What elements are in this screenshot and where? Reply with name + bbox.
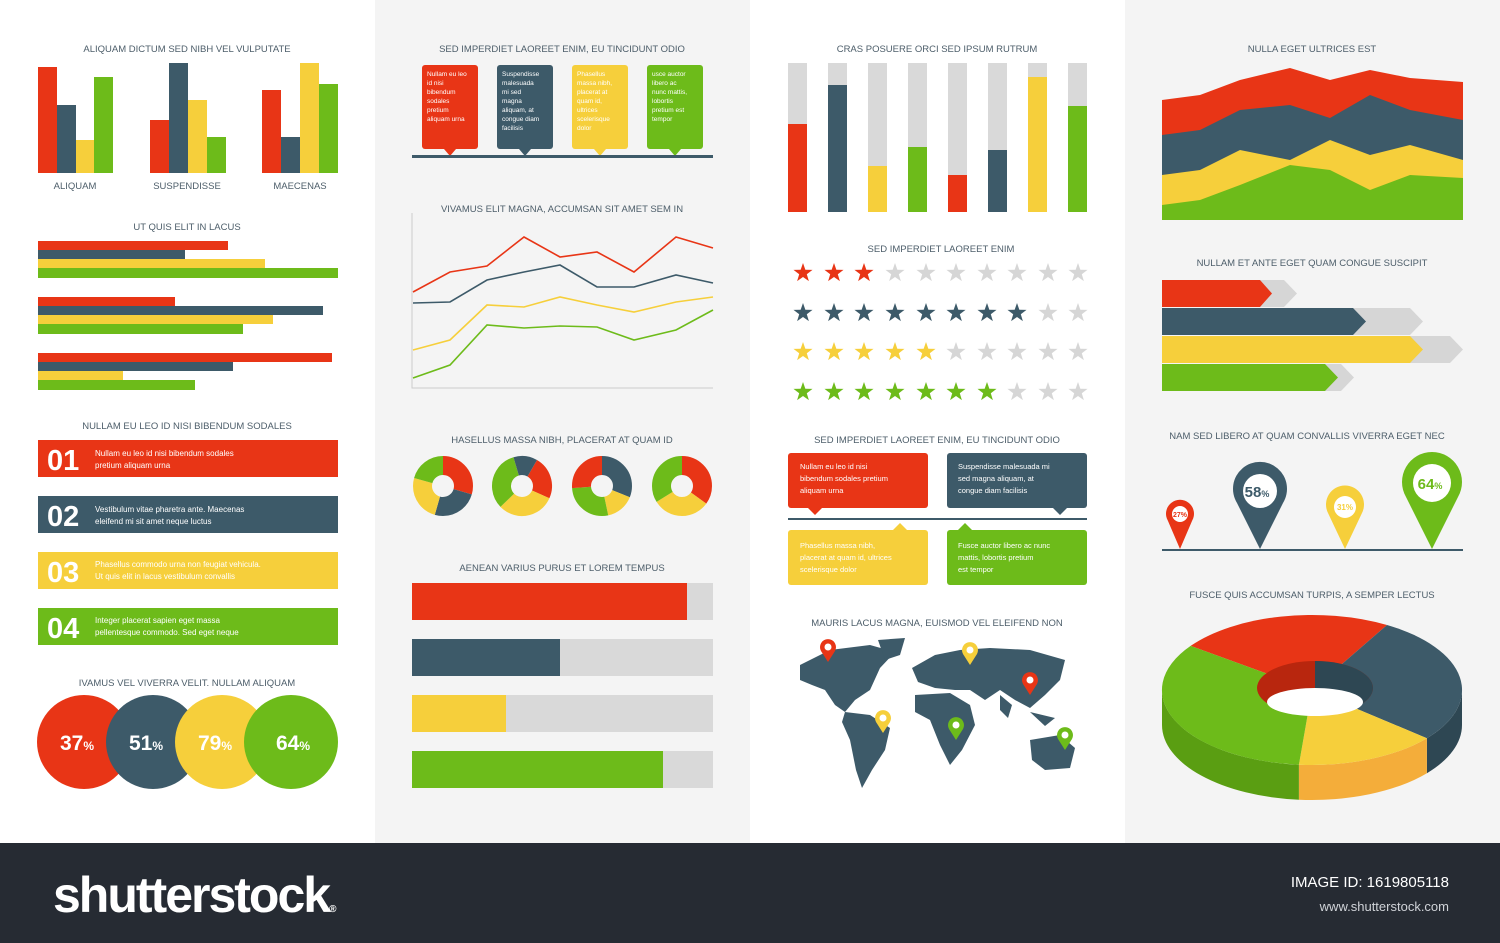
callout boxes: libero ac — [652, 80, 677, 87]
numbered list: 04 — [47, 613, 79, 645]
heading: horizontal bars: UT QUIS ELIT IN LACUS — [133, 222, 241, 233]
donut charts — [422, 458, 702, 514]
callout boxes: dolor — [577, 125, 592, 132]
numbered list: Ut quis elit in lacus vestibulum convallis — [95, 572, 235, 581]
heading: numbered list: NULLAM EU LEO ID NISI BIBENDUM SODALES — [82, 421, 292, 432]
callout boxes: usce auctor — [652, 71, 686, 78]
callout boxes: Phasellus — [577, 71, 606, 78]
footer image id: IMAGE ID: 1619805118 — [1291, 874, 1449, 891]
percentage circles: 51% — [129, 732, 163, 755]
panel: column 3 — [788, 44, 1088, 788]
callout boxes: sodales — [427, 98, 450, 105]
callout boxes: malesuada — [502, 80, 534, 87]
percentage circles: 79% — [198, 732, 232, 755]
pin markers: 58% — [1245, 484, 1269, 501]
callout boxes: aliquam urna — [427, 116, 465, 123]
footer bar — [0, 843, 1500, 943]
text boxes: sed magna aliquam, at — [958, 474, 1035, 483]
panel: column 4 — [1162, 44, 1463, 800]
heading: circles: IVAMUS VEL VIVERRA VELIT. NULLAM ALIQUAM — [79, 678, 295, 689]
numbered list: pretium aliquam urna — [95, 461, 171, 470]
grouped bar chart — [38, 63, 338, 192]
callout boxes: massa nibh, — [577, 80, 612, 87]
callout boxes: id nisi — [427, 80, 444, 87]
numbered list: eleifend mi sit amet neque luctus — [95, 517, 212, 526]
text boxes: Suspendisse malesuada mi — [958, 462, 1050, 471]
numbered list: 03 — [47, 557, 79, 589]
text boxes: placerat at quam id, ultrices — [800, 553, 892, 562]
horizontal bar chart — [38, 241, 338, 390]
stacked area chart — [1162, 68, 1463, 220]
callout boxes: magna — [502, 98, 522, 105]
heading: star ratings: SED IMPERDIET LAOREET ENIM — [868, 244, 1015, 255]
map pins — [820, 639, 1073, 750]
text boxes: mattis, lobortis pretium — [958, 553, 1033, 562]
callout boxes: placerat at — [577, 89, 608, 96]
star ratings — [793, 263, 1088, 400]
callout boxes: Suspendisse — [502, 71, 540, 78]
heading: 3D donut: FUSCE QUIS ACCUMSAN TURPIS, A SEMPER LECTUS — [1189, 590, 1435, 601]
numbered list: 02 — [47, 501, 79, 533]
text boxes: congue diam facilisis — [958, 486, 1027, 495]
callout boxes: bibendum — [427, 89, 456, 96]
text boxes: est tempor — [958, 565, 994, 574]
numbered list — [38, 440, 338, 645]
callout boxes: pretium — [427, 107, 449, 114]
heading: grouped bars: ALIQUAM DICTUM SED NIBH VEL VULPUTATE — [83, 44, 291, 55]
text boxes: aliquam urna — [800, 486, 844, 495]
percentage circles: 64% — [276, 732, 310, 755]
heading: progress bars: AENEAN VARIUS PURUS ET LOREM TEMPUS — [459, 563, 665, 574]
pin markers — [1162, 452, 1463, 551]
callout boxes — [412, 65, 713, 158]
heading: vertical bars: CRAS POSUERE ORCI SED IPSUM RUTRUM — [837, 44, 1037, 55]
callout boxes: mi sed — [502, 89, 522, 96]
percentage circles: 37% — [60, 732, 94, 755]
numbered list: Nullam eu leo id nisi bibendum sodales — [95, 449, 234, 458]
footer logo: shutterstock® — [53, 867, 337, 923]
callout boxes: tempor — [652, 116, 673, 123]
callout boxes: ultrices — [577, 107, 598, 114]
heading: donuts: HASELLUS MASSA NIBH, PLACERAT AT QUAM ID — [451, 435, 673, 446]
panel: column 1 — [37, 44, 338, 789]
text boxes: scelerisque dolor — [800, 565, 857, 574]
callout boxes: Nullam eu leo — [427, 71, 467, 78]
panel: column 2 — [412, 44, 713, 788]
text boxes: bibendum sodales pretium — [800, 474, 888, 483]
pin markers: 31% — [1337, 503, 1353, 512]
callout boxes: aliquam, at — [502, 107, 534, 114]
3D donut chart — [1162, 615, 1462, 800]
callout boxes: scelerisque — [577, 116, 610, 123]
text boxes: Fusce auctor libero ac nunc — [958, 541, 1050, 550]
numbered list: Vestibulum vitae pharetra ante. Maecenas — [95, 505, 244, 514]
footer url: www.shutterstock.com — [1319, 899, 1449, 914]
callout boxes: lobortis — [652, 98, 674, 105]
numbered list: 01 — [47, 445, 79, 477]
heading: world map: MAURIS LACUS MAGNA, EUISMOD VEL ELEIFEND NON — [811, 618, 1063, 629]
text boxes: Nullam eu leo id nisi — [800, 462, 867, 471]
percentage circles — [37, 695, 338, 789]
grouped bar chart: SUSPENDISSE — [153, 181, 221, 192]
numbered list: Integer placerat sapien eget massa — [95, 616, 221, 625]
callout boxes: pretium est — [652, 107, 684, 114]
heading: text boxes: SED IMPERDIET LAOREET ENIM, EU TINCIDUNT ODIO — [814, 435, 1060, 446]
vertical progress bars — [788, 63, 1087, 212]
arrow bars — [1162, 280, 1463, 391]
heading: callouts: SED IMPERDIET LAOREET ENIM, EU TINCIDUNT ODIO — [439, 44, 685, 55]
callout boxes: nunc mattis, — [652, 89, 687, 96]
heading: area chart: NULLA EGET ULTRICES EST — [1248, 44, 1376, 55]
heading: pins: NAM SED LIBERO AT QUAM CONVALLIS VIVERRA EGET NEC — [1169, 431, 1445, 442]
world map — [800, 638, 1075, 788]
callout boxes: quam id, — [577, 98, 602, 105]
pin markers: 27% — [1173, 512, 1188, 519]
grouped bar chart: MAECENAS — [273, 181, 327, 192]
text boxes: Phasellus massa nibh, — [800, 541, 875, 550]
numbered list: Phasellus commodo urna non feugiat vehicula. — [95, 560, 261, 569]
progress bars — [412, 583, 713, 788]
callout boxes: facilisis — [502, 125, 524, 132]
numbered list: pellentesque commodo. Sed eget neque — [95, 628, 239, 637]
callout boxes: congue diam — [502, 116, 539, 123]
line chart — [412, 213, 713, 388]
grouped bar chart: ALIQUAM — [54, 181, 96, 192]
heading: line chart: VIVAMUS ELIT MAGNA, ACCUMSAN SIT AMET SEM IN — [441, 204, 683, 215]
text boxes — [788, 453, 1087, 585]
heading: arrow bars: NULLAM ET ANTE EGET QUAM CONGUE SUSCIPIT — [1197, 258, 1428, 269]
pin markers: 64% — [1418, 476, 1442, 493]
